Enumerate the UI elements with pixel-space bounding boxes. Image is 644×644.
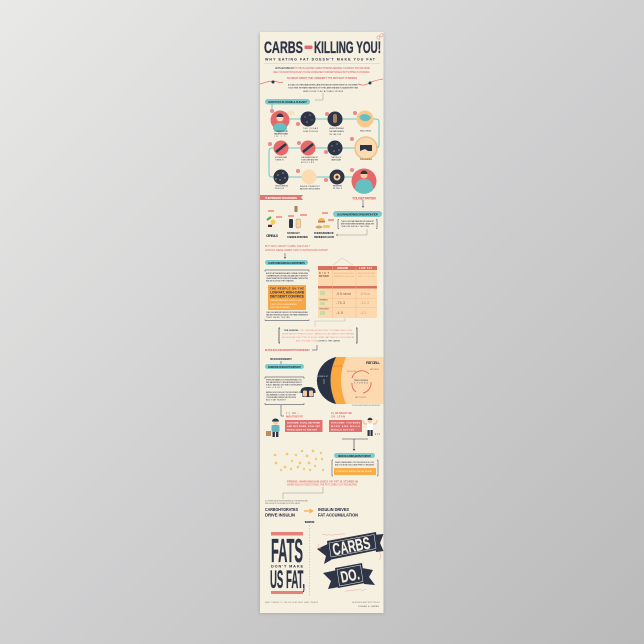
- bracketed conclusion: AND THE WAY YOU CONTROL THE CARBS: [296, 340, 341, 342]
- red box 2: MUSCLE NOT FAT: [331, 428, 355, 432]
- exercise text: CALORIES: [266, 386, 283, 389]
- question text: [265, 244, 329, 252]
- pill: exercise: [265, 364, 304, 369]
- results table: ATE AS MUCH AS THEY: [334, 272, 355, 275]
- summary: carbs drive insulin: CARBOHYDRATES: [265, 507, 298, 512]
- question: exercise: BUT, SHOULD I EVEN WANT TO EXERCISE?: [265, 348, 310, 352]
- arrow orange: [304, 509, 312, 513]
- flow step 10: cell: [296, 169, 321, 190]
- results table: LOW FAT: [359, 267, 373, 270]
- intro text: SO WHAT ABOUT THE 'ANSWER'? IT'S NOT WHY IT WORKS: [287, 77, 357, 80]
- pill: sugar and carbs: [333, 211, 382, 217]
- poster: [260, 32, 384, 613]
- results table: [318, 258, 377, 318]
- bracketed conclusion: THE LESSON: YOU CAN EAT AS MUCH AS YOU WANT AND LOSE: [284, 329, 353, 332]
- icon: muscular man: [363, 418, 381, 436]
- bracket text: ARE THOSE HIGHEST IN REFINED CARBS, THE: [341, 222, 375, 226]
- results table: AND LOW FAT: [358, 275, 376, 278]
- question text: BUT WAIT, AREN'T CARBS THE FUEL?: [265, 244, 311, 248]
- option 1 heading: MIGHT BE FAT: [286, 414, 303, 418]
- study text block: A STUDY AT THE NEW ENGLAND JOURNAL OF MEDICINE: [266, 272, 309, 275]
- intro text: LET'S GET A BIG NO: IT'S THE SUGAR AND CARBOHYDRATES SENDING YOUR BODY INTO FAT MODE: [275, 67, 370, 70]
- orange callout: DIET DIDN'T CONVINCE: [270, 294, 304, 298]
- subtitle: WHY EATING FAT DOESN'T MAKE YOU FAT: [265, 58, 376, 62]
- summary: insulin drives fat: [318, 507, 359, 518]
- flow step 5: fat store: [350, 137, 377, 161]
- exercise text: YOUR METABOLISM IN THE PROCESS: [266, 396, 297, 399]
- flow step 4: pancreas: [353, 110, 374, 132]
- pill: low carb: [265, 260, 308, 265]
- study text below: THE LOW-CARB DIET GROUP LOST MORE WEIGHT AND: [266, 311, 309, 314]
- item: starchy carbohydrates: STARCHY: [287, 231, 300, 235]
- fat cell diagram: FAT CELL: [366, 360, 381, 365]
- item: cereals: [266, 210, 282, 238]
- option 1 heading: [286, 411, 303, 418]
- red box 2: MORE AND BUILD: [331, 425, 360, 428]
- bracket text with orange box: WHEN CARBS ARE LOW THE INSULIN IS LOW: [335, 461, 374, 464]
- flow step 2: dark circle: THE SUGAR: [303, 127, 319, 130]
- fat cell diagram: TRIGLYCERIDES: [354, 380, 369, 382]
- footer left: MANY THANKS TO THE BOOK AUTHOR GARY TAUBES: [265, 601, 319, 604]
- flow step 3: bloodstream: THE PANCREAS IS: [329, 130, 345, 133]
- footer right: [352, 601, 381, 608]
- title: CARBS: [264, 38, 303, 57]
- bracketed conclusion: [279, 328, 357, 343]
- item: refined flour: [314, 212, 335, 239]
- small text: SO THERE IS A HORMONE BEHIND ALL THE WEIGHT AND: [265, 500, 309, 502]
- banner: primary offenders: THE PRIMARY OFFENDERS: [265, 196, 297, 200]
- item: refined flour: REFINED FLOUR: [314, 235, 335, 239]
- red box 2: OUTCOME: YOU BURN: [331, 422, 360, 424]
- flow step 3: bloodstream: ON THE JOB: [329, 134, 342, 136]
- exercise text: WILL EAT MORE, NOT LESS, AFTER A WORKOUT: [266, 381, 303, 384]
- study text block: EAT AS MUCH AS THEY WANTED: [266, 280, 295, 282]
- poster: US FAT,: [270, 566, 305, 594]
- flow step 1: person eating: YOU EAT FOOD THAT: [274, 130, 289, 133]
- summary: carbs drive insulin: DRIVE INSULIN: [265, 512, 296, 518]
- fat cell diagram: GLYCEROL 3P: [316, 376, 329, 378]
- red statement: WHEN INSULIN GOES DOWN, THE FAT COMES OUT AND BURNS: [287, 484, 357, 486]
- red box 1: WHICH GOES TO THE GUT: [287, 430, 318, 432]
- fat cell diagram: SOURCE: GARY TAUBES, WHY WE GET FAT: [352, 404, 380, 407]
- title: [264, 34, 383, 57]
- small text: [265, 500, 309, 505]
- pill: how sugar: HOW FOCUS ON ME & SUGAR?: [268, 100, 307, 104]
- banner: do: [323, 563, 375, 589]
- explanation text: YOU'D THINK THE ENEMY WAS FAT BUT IT'S THE CARBS THAT ARE TO BLAME EVERY TIME: [288, 86, 359, 90]
- flow step 3: bloodstream: LEVELS RISE AND: [329, 127, 345, 130]
- red box 1: [285, 420, 322, 432]
- arrow down to next section: [342, 439, 368, 450]
- flow step 3: bloodstream: [325, 112, 345, 136]
- orange callout: THEIR DIET WAS NEARLY SHORT OF GOAL: [270, 299, 303, 302]
- red box 2: [329, 420, 362, 432]
- flow step 8: red circle: [268, 140, 288, 162]
- lockup: fats don't make us fat: [270, 532, 305, 594]
- orange callout: [268, 285, 306, 310]
- flow step 1: person eating: IN IT: [274, 136, 286, 138]
- option 2 heading: [331, 411, 352, 418]
- bracketed conclusion: MORE WEIGHT WHEN YOU CUT CARBS OUT. CALORIES DO NOT MATTER: [282, 332, 354, 336]
- flow step 9: fat in blood: [274, 170, 289, 190]
- item: refined flour: FOODS MADE OF: [314, 231, 334, 235]
- flow step 10: cell: INSULIN CONVERTS IT: [300, 186, 321, 188]
- lockup: fats don't make us fat: DON'T MAKE: [271, 564, 303, 568]
- orange callout: THEY COULD NOT BURN FAT AT ALL: [270, 303, 298, 306]
- heading: you get fatter: YOU GET FATTER: [352, 196, 376, 200]
- pink squiggles: [318, 534, 380, 591]
- intro text: WELL YOUR FAT ISN'T ENOUGH. YOU'VE COMPLETED YOUR DIET INSTEAD, BUT NOTHING IS CHANGING.: [273, 71, 370, 74]
- banner: carbs: [317, 532, 384, 564]
- flow step 12: fatter person: [350, 168, 376, 194]
- flow step 8: red circle: EXTRA SUGAR: [275, 156, 288, 159]
- red box 1: AND NOT BURN. STILL FAT: [287, 425, 321, 428]
- banner: do: DO.: [339, 566, 361, 587]
- bracket text with orange box: [332, 460, 378, 476]
- flow step 6: dark circle: [324, 140, 342, 162]
- flow step 4: pancreas: PANCREAS: [360, 130, 372, 132]
- flow step 11: ring: FAT STORED: [333, 184, 343, 188]
- banner: carbs: CARBS: [331, 534, 372, 559]
- exercise text: EXERCISE MAKES YOU HUNGRIER AND YOU: [266, 378, 303, 382]
- study text below: THAT WERE TESTED: [266, 316, 291, 319]
- results table: -4.5: [336, 311, 343, 315]
- results table: METHOD: [319, 275, 329, 278]
- orange callout: NOR LOSE THE WEIGHT: [270, 307, 291, 309]
- exercise text: IT ALSO TAKES A LONG TIME TO BURN A FEW: [266, 384, 302, 386]
- icon: two heads: [300, 387, 316, 397]
- results table: -9.5 mmol: [336, 292, 351, 296]
- pill: how sugar: [265, 99, 310, 104]
- icon: heavy person with box: [266, 418, 280, 437]
- study text block: [265, 270, 309, 282]
- flow step 6: dark circle: TAKE SUGAR: [331, 158, 342, 162]
- fat cell diagram: GLUCOSE: [347, 371, 357, 373]
- flow step 8: red circle: TURNS TO: [275, 160, 285, 162]
- red statement: PERIOD: WHEN INSULIN GOES UP, FAT IS STORED IN: [287, 480, 358, 484]
- results table: -75.3: [336, 301, 345, 305]
- bracket text with orange box: AND YOUR FAT CELLS ARE FREE TO RELEASE: [335, 464, 375, 466]
- question text: HOW DO THESE CARBS TURN TO FATTER AND FASTER?: [265, 248, 329, 252]
- fat cell diagram: [316, 357, 384, 407]
- question: exercise: SO, SO GOOD KNOWS ?: [270, 358, 293, 361]
- explanation text: [288, 84, 359, 93]
- pill: exercise: EXERCISE DOES NOT BURN FAT: [268, 365, 301, 369]
- bracketed conclusion: AS MUCH AS THE TYPE OF FOOD. WHAT MATTERS IS YOUR INSULIN: [282, 336, 354, 339]
- banner: primary offenders: [260, 195, 303, 200]
- flow connector: [269, 104, 379, 177]
- fat cell diagram: STORED: [354, 382, 369, 384]
- flow step 7: red circle: YOUR LIVER AND THE: [301, 158, 319, 162]
- bracket text: [338, 220, 377, 228]
- results table: WANTED BUT ONLY LOW: [334, 275, 354, 278]
- flow step 5: fat store: INSULIN RISES: [360, 159, 373, 161]
- flow step 7: red circle: THE SUGAR GOES TO: [301, 156, 319, 159]
- results table: -5.5 oz: [360, 292, 370, 296]
- summary: insulin drives fat: INSULIN DRIVES: [318, 507, 349, 512]
- flow step 7: red circle: MUSCLES: [301, 162, 315, 164]
- study text below: [265, 311, 309, 320]
- exercise text: EATING LESS DOES NOT WORK EITHER. CUT: [266, 391, 303, 394]
- summary: insulin drives fat: FAT ACCUMULATION: [318, 512, 359, 518]
- flow step 11: ring: [324, 170, 344, 190]
- pill: fat storage: REDUCE CARBS, BURN YOUR FAT: [338, 454, 371, 458]
- results table: TRIGLYCERIDE: [319, 308, 330, 310]
- item: starchy carbohydrates: CARBOHYDRATES: [287, 235, 308, 239]
- results table: LOW CARB: [337, 267, 348, 270]
- fat dots scatter: [274, 450, 324, 471]
- fat cell diagram: FATTY ACID: [370, 368, 380, 371]
- arrow down: [362, 200, 364, 208]
- orange callout: LOW-FAT, HIGH-CARB: [270, 290, 305, 294]
- results table: CHOLESTEROL: [319, 300, 329, 302]
- red box 1: OUTCOME: YOU'LL EAT MORE: [287, 422, 321, 424]
- pill: sugar and carbs: SUGAR AND REFINED CARBS ARE THE TOP: [337, 212, 378, 216]
- option 2 heading: 2.) HE MIGHT BE: [331, 411, 352, 415]
- icon: muscular man: FIT: [375, 434, 381, 436]
- flow step 10: cell: BACK INTO TRIGLYCERIDE: [300, 188, 321, 190]
- summary: carbs drive insulin: [265, 507, 298, 518]
- study text below: HAD BETTER RESULTS IN ALL THE HEALTH MARKERS: [266, 314, 309, 316]
- pill: fat storage: [334, 453, 375, 458]
- fat cell diagram: FATTY ACID: [355, 396, 367, 399]
- intro text: [273, 67, 370, 80]
- therefore: THEREFORE: [304, 521, 315, 524]
- flow step 6: dark circle: THE CELLS: [331, 157, 342, 159]
- flow step 1: person eating: [270, 109, 295, 138]
- poster: FATS: [271, 532, 303, 569]
- results table: -1.2: [360, 311, 366, 315]
- flow step 1: person eating: HAS CARBOHYDRATE: [274, 132, 289, 136]
- flow step 7: red circle: [297, 140, 319, 164]
- bracket text: THE FOODS THAT RAISE INSULIN THE MOST: [341, 220, 375, 223]
- results table: ATE LESS CALORIES: [358, 272, 376, 275]
- bracket text with orange box: YOUR BODY BURNS THE FAT STORE: [336, 470, 373, 473]
- small text: INSULIN GETS ITS SIGNAL FROM THE CARBS: [265, 502, 301, 505]
- option 1 heading: 1.) HE...: [286, 411, 300, 415]
- exercise text: [265, 377, 304, 404]
- flow step 9: fat in blood: IN BLOOD: [275, 188, 285, 190]
- pill: low carb: LOW-CARB VERSUS LOW-FAT DIETS: [268, 261, 305, 265]
- bracket text: ONES WE EAT ALL THE TIME: [341, 225, 370, 228]
- item: cereals: CEREALS: [266, 234, 278, 238]
- question: exercise: [265, 345, 317, 364]
- study text block: COMPARED A GROUP ON A LOW-CARB DIET TO A GROUP: [266, 274, 309, 278]
- explanation text: ACTUALLY, NOTHING BEATS A HIGH-CARBOHYDRATE DIET WHEN OBESITY IS CONCERNED: [288, 84, 359, 86]
- title: KILLING YOU!: [314, 38, 381, 57]
- flow step 9: fat in blood: TRIGLYCERIDES: [275, 186, 289, 188]
- footer right: SUGAR & CARBS: [358, 605, 380, 608]
- red statement: [287, 480, 358, 486]
- study text block: ON A LOW-FAT DIET FOR SIX MONTHS AND THE PEOPLE: [266, 277, 309, 280]
- footer right: DESIGNED AND WRITTEN BY: [352, 601, 381, 604]
- explanation text: HERE'S HOW IT ALL ACTUALLY WORKS: [303, 90, 344, 93]
- orange callout: THE PEOPLE ON THE: [270, 286, 304, 290]
- ribbon squiggles: [260, 79, 383, 85]
- flow step 2: dark circle: [296, 112, 319, 133]
- fat cell diagram: INSULIN: [333, 366, 343, 368]
- option 2 heading: SO LEAN: [331, 414, 345, 418]
- results table: -14.3: [360, 301, 369, 305]
- flow step 11: ring: IN CELLS: [333, 188, 343, 190]
- flow step 2: dark circle: GOES TO BLOOD: [303, 131, 319, 133]
- exercise text: AND STAY HUNGRY: [266, 398, 287, 402]
- exercise text: CALORIES AND YOU WILL SLOW DOWN: [266, 394, 297, 396]
- results table: DIET: [319, 272, 330, 275]
- item: starchy carbohydrates: [287, 206, 308, 239]
